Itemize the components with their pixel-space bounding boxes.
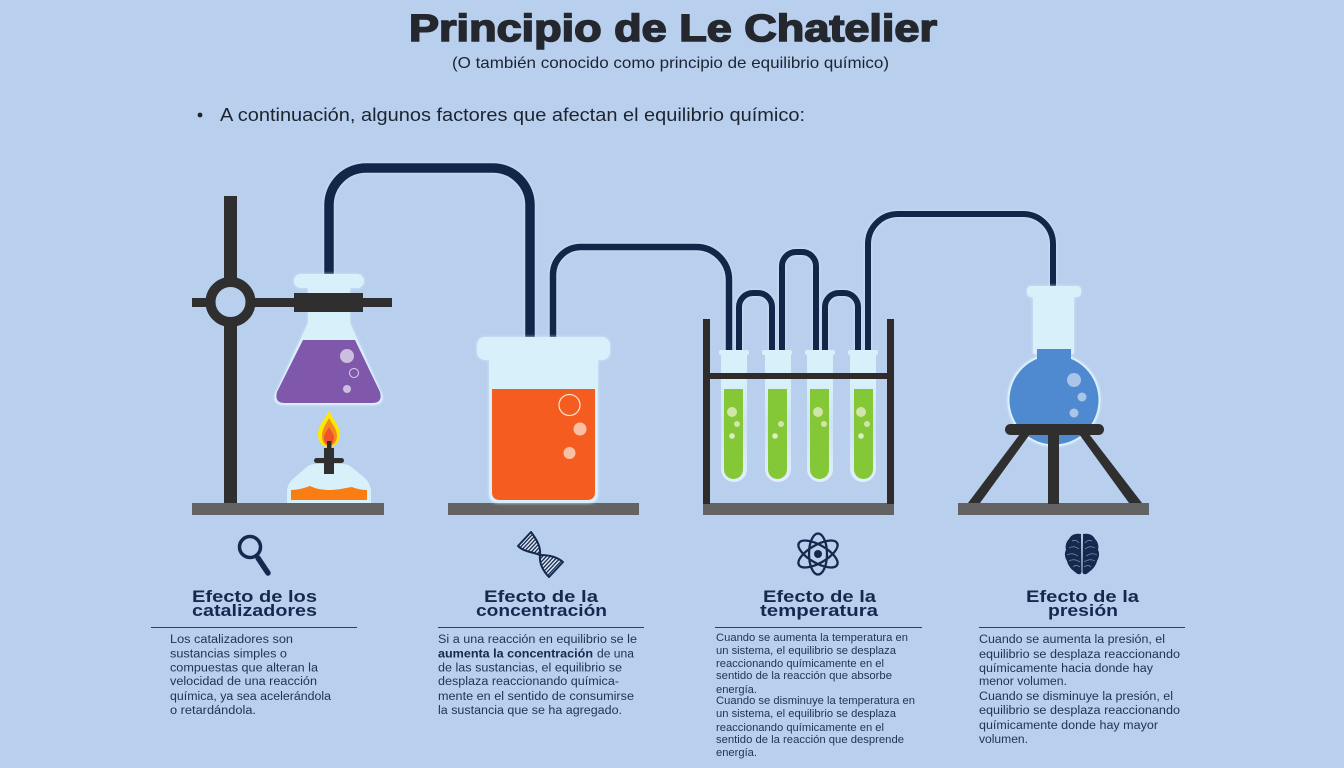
connecting tubes: between test tubes xyxy=(739,252,858,350)
test tube 1 xyxy=(719,350,749,482)
column 3: text: sentido de la reacción que desprende xyxy=(716,734,904,746)
column 4: rule xyxy=(979,627,1185,628)
column 3: rule xyxy=(715,627,922,628)
column 2: heading xyxy=(476,587,607,620)
column 3: text: reaccionando químicamente en el xyxy=(716,722,884,734)
rack posts xyxy=(703,319,894,504)
column 2: text: aumenta la concentración xyxy=(438,648,593,660)
test tube 4 xyxy=(848,350,878,482)
column 1: text: sustancias simples o xyxy=(170,648,287,660)
column 4: text: equilibrio se desplaza reaccionando xyxy=(979,705,1180,717)
flask clamp xyxy=(294,293,363,312)
column 2: text: mente en el sentido de consumirse xyxy=(438,691,634,703)
column 4: text: Cuando se disminuye la presión, el xyxy=(979,691,1173,703)
icon: dna xyxy=(518,532,563,577)
icon: atom xyxy=(794,534,842,574)
column 4: text: volumen. xyxy=(979,734,1028,746)
column 1: text: química, ya sea acelerándola xyxy=(170,691,332,703)
connecting tube: flask to beaker xyxy=(329,168,530,338)
column 3: heading: temperatura xyxy=(760,601,879,620)
column 4: heading xyxy=(1026,587,1140,620)
column 2: heading: concentración xyxy=(476,601,607,620)
blue liquid xyxy=(1010,349,1098,444)
intro bullet: A continuación, algunos factores que afectan el equilibrio químico: xyxy=(220,105,805,125)
flask bubbles xyxy=(340,349,358,393)
column 3: text: sentido de la reacción que absorbe xyxy=(716,670,892,682)
connecting tube: rack to round flask xyxy=(868,214,1053,350)
column 3: heading: Efecto de la xyxy=(763,587,877,606)
icon: brain xyxy=(1065,534,1099,574)
column 4: text: químicamente donde hay mayor xyxy=(979,720,1158,732)
apparatus 4: round flask on tripod xyxy=(958,286,1149,515)
column 3: text xyxy=(716,632,915,759)
column 4: heading: presión xyxy=(1048,601,1118,620)
horizontal arm xyxy=(192,298,392,307)
column 1: heading xyxy=(192,587,317,620)
column 2: text xyxy=(438,634,637,717)
base plate 1 xyxy=(192,503,384,515)
beaker bubbles xyxy=(559,394,586,459)
column 1: heading: catalizadores xyxy=(192,601,317,620)
column 2: text: de una xyxy=(597,648,635,660)
base plate 2 xyxy=(448,503,639,515)
flask bubbles xyxy=(1067,373,1086,418)
column 1: text: velocidad de una reacción xyxy=(170,676,317,688)
column 1: text: compuestas que alteran la xyxy=(170,662,319,674)
column 2: text: de las sustancias, el equilibrio se xyxy=(438,662,622,674)
column 2: heading: Efecto de la xyxy=(484,587,599,606)
column 1: rule xyxy=(151,627,357,628)
icon: magnifying glass xyxy=(240,536,268,573)
column 4: heading: Efecto de la xyxy=(1026,587,1140,606)
column 3: text: reaccionando químicamente en el xyxy=(716,658,884,670)
column 1: text: Los catalizadores son xyxy=(170,634,293,646)
column 1: heading: Efecto de los xyxy=(192,587,317,606)
column 2: rule xyxy=(438,627,644,628)
column 3: text: energía. xyxy=(716,747,757,759)
title: Principio de Le Chatelier xyxy=(409,8,937,50)
connecting tube: beaker to rack xyxy=(553,247,729,350)
test tube 2 xyxy=(762,350,792,482)
column 2: text: Si a una reacción en equilibrio se le xyxy=(438,634,637,646)
tripod xyxy=(968,424,1142,504)
column 3: heading xyxy=(760,587,879,620)
apparatus 1: stand, flask and burner xyxy=(192,196,392,515)
flask glass xyxy=(1008,286,1100,446)
stand rod xyxy=(224,196,237,503)
test tube 3 xyxy=(805,350,835,482)
burner body xyxy=(287,464,371,503)
burner fuel xyxy=(291,486,367,500)
column 4: text: equilibrio se desplaza reaccionando xyxy=(979,649,1180,661)
apparatus 3: test tube rack xyxy=(703,319,894,515)
apparatus 2: beaker xyxy=(448,337,639,515)
column 4: text: menor volumen. xyxy=(979,676,1067,688)
column 4: text: químicamente hacia donde hay xyxy=(979,663,1153,675)
column 2: text: la sustancia que se ha agregado. xyxy=(438,705,622,717)
base plate 4 xyxy=(958,503,1149,515)
flask glass xyxy=(274,274,383,405)
beaker glass xyxy=(477,337,610,503)
flame xyxy=(318,410,340,447)
column 3: text: un sistema, el equilibrio se desplaza xyxy=(716,645,896,657)
column 1: text xyxy=(170,634,332,717)
rack crossbar xyxy=(703,373,894,379)
ring clamp xyxy=(210,282,250,322)
orange liquid xyxy=(492,389,595,500)
column 2: text: desplaza reaccionando química- xyxy=(438,676,619,688)
column 1: text: o retardándola. xyxy=(170,705,256,717)
column 3: text: un sistema, el equilibrio se desplaza xyxy=(716,708,896,720)
column 4: text xyxy=(979,634,1180,746)
base plate 3 xyxy=(703,503,894,515)
column 4: text: Cuando se aumenta la presión, el xyxy=(979,634,1165,646)
column 3: text: energía. xyxy=(716,684,757,696)
column 3: text: Cuando se disminuye la temperatura en xyxy=(716,695,915,707)
burner stem xyxy=(314,441,344,474)
subtitle: (O también conocido como principio de equilibrio químico) xyxy=(452,55,889,72)
purple liquid xyxy=(276,340,381,403)
column 3: text: Cuando se aumenta la temperatura en xyxy=(716,632,908,644)
